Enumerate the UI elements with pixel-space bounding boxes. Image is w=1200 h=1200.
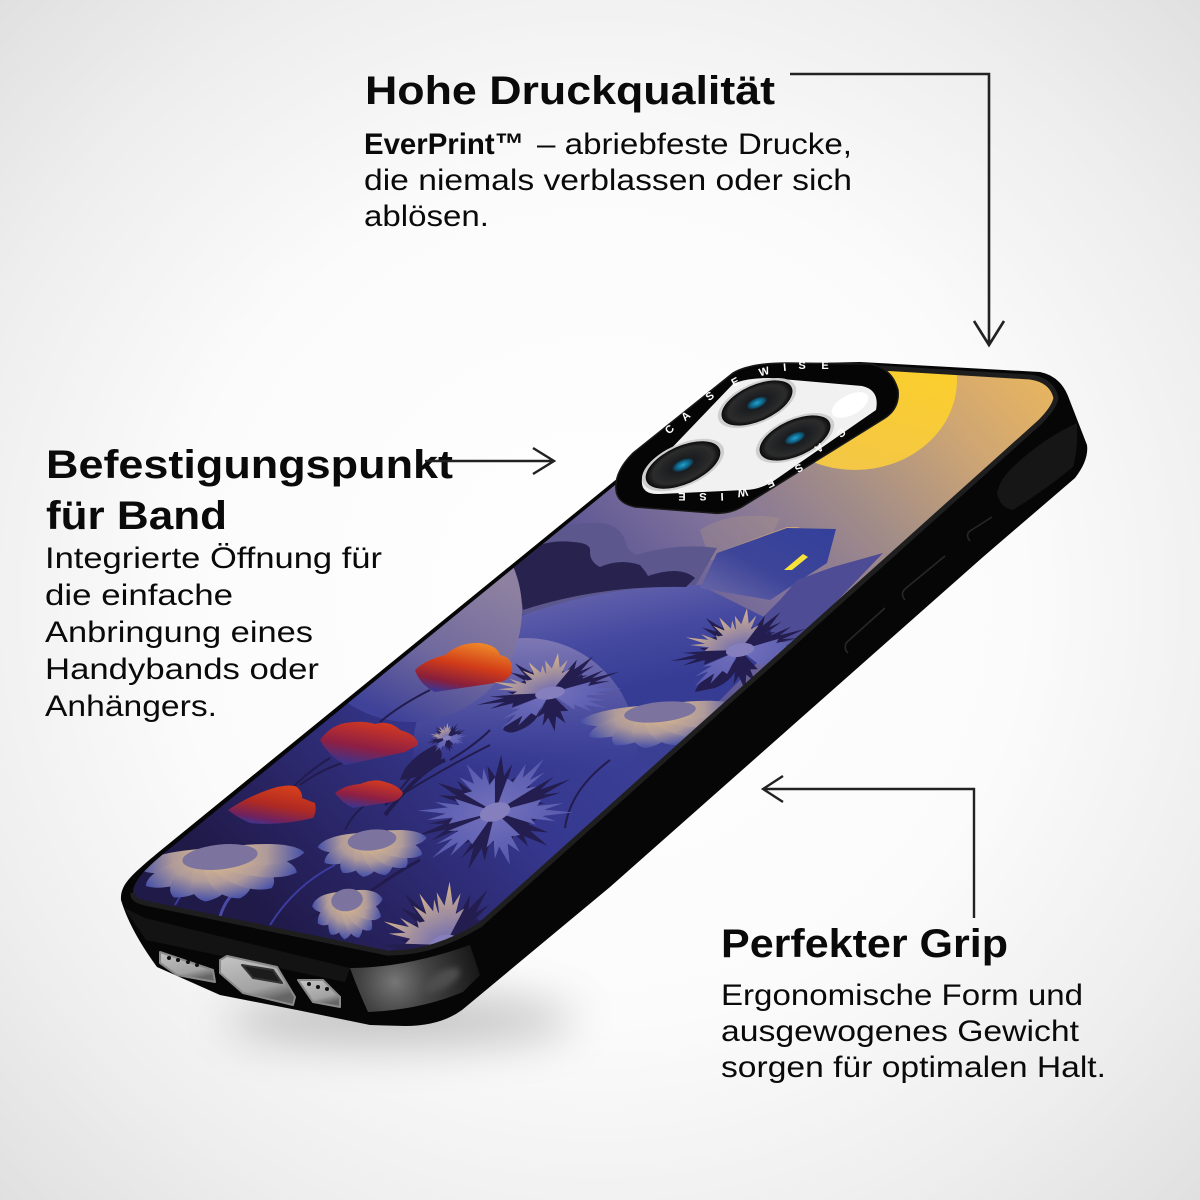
heading: Befestigungspunkt xyxy=(46,443,453,487)
side buttons xyxy=(845,423,1077,653)
phone case xyxy=(120,362,1088,1026)
CASEWISE lettering: E xyxy=(764,476,776,490)
dark cloud xyxy=(510,541,695,610)
CASEWISE lettering: S xyxy=(699,490,707,502)
pale clouds xyxy=(700,516,780,560)
camera block xyxy=(616,360,898,513)
CASEWISE lettering: E xyxy=(821,360,829,372)
body text xyxy=(364,128,852,233)
CASEWISE lettering: E xyxy=(730,375,742,389)
screen bezel xyxy=(133,368,1056,953)
hill xyxy=(518,585,777,706)
CASEWISE lettering: A xyxy=(812,440,825,455)
heading: für Band xyxy=(46,494,227,538)
lower circle xyxy=(414,638,628,750)
body text: ausgewogenes Gewicht xyxy=(721,1015,1080,1048)
callout: strap attachment xyxy=(45,443,554,723)
body text: Integrierte Öffnung für xyxy=(45,542,382,575)
poppies xyxy=(228,643,512,824)
cornflowers xyxy=(357,597,818,1020)
body text xyxy=(721,979,1106,1084)
arrow xyxy=(790,74,1004,345)
body text: EverPrint™ xyxy=(364,128,524,161)
arrow xyxy=(763,776,974,918)
CASEWISE lettering: S xyxy=(792,461,805,475)
house roof stripe xyxy=(717,527,800,555)
body text: Anbringung eines xyxy=(45,616,313,649)
moon xyxy=(814,371,957,470)
body text: Handybands oder xyxy=(45,653,319,686)
far hill xyxy=(760,553,883,650)
printed artwork xyxy=(133,370,1054,950)
CASEWISE lettering: I xyxy=(720,490,724,502)
small flower xyxy=(427,723,466,752)
art background xyxy=(133,375,1054,950)
heading xyxy=(46,443,453,538)
case lip xyxy=(124,908,350,982)
bottom ports xyxy=(160,952,340,1007)
heading: Hohe Druckqualität xyxy=(365,69,775,113)
window xyxy=(784,554,808,570)
lenses xyxy=(634,368,842,502)
camera glass xyxy=(642,378,877,494)
CASEWISE lettering: C xyxy=(663,423,677,437)
CASEWISE lettering xyxy=(663,360,848,502)
flash xyxy=(828,387,872,423)
stems xyxy=(175,690,610,935)
daisies xyxy=(134,694,745,946)
CASEWISE lettering: C xyxy=(834,425,848,439)
CASEWISE lettering: W xyxy=(736,485,749,499)
arrow xyxy=(425,448,554,474)
house xyxy=(700,528,836,600)
CASEWISE lettering: W xyxy=(758,365,771,379)
case body xyxy=(121,362,1087,1026)
CASEWISE lettering: S xyxy=(798,360,806,372)
pale moon circle xyxy=(348,568,522,722)
body text: die niemals verblassen oder sich xyxy=(364,164,852,197)
body text: Anhängers. xyxy=(45,690,217,723)
CASEWISE lettering: E xyxy=(678,490,686,502)
CASEWISE lettering: I xyxy=(783,362,787,374)
body text: ablösen. xyxy=(364,200,489,233)
highlight stripe xyxy=(421,963,463,997)
buds xyxy=(400,660,740,780)
heading: Perfekter Grip xyxy=(721,922,1008,966)
body text: sorgen für optimalen Halt. xyxy=(721,1051,1106,1084)
body text xyxy=(45,542,382,723)
CASEWISE lettering: S xyxy=(704,390,717,404)
phone shadow xyxy=(225,994,575,1046)
body text: die einfache xyxy=(45,579,233,612)
body text: – abriebfeste Drucke, xyxy=(537,128,852,161)
camera ring xyxy=(616,363,898,513)
corner highlight xyxy=(350,945,480,1012)
body text: Ergonomische Form und xyxy=(721,979,1083,1012)
CASEWISE lettering: A xyxy=(679,410,693,424)
callout: print quality xyxy=(364,69,1004,345)
callout: grip xyxy=(721,776,1106,1084)
